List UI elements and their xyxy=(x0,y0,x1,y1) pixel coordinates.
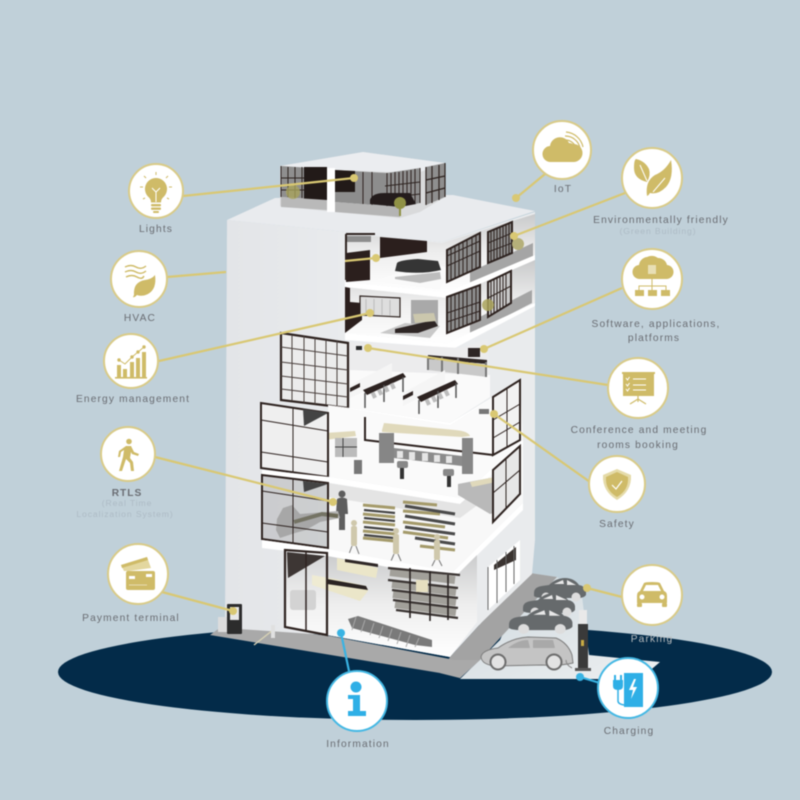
line: rtls xyxy=(155,457,337,506)
panel: iot xyxy=(533,121,591,195)
label: Payment terminal xyxy=(82,613,180,624)
label: Lights xyxy=(139,224,173,235)
bollard xyxy=(254,625,275,645)
shopping basket stack xyxy=(290,590,316,610)
panel: lights xyxy=(129,164,183,235)
panel: charging xyxy=(598,658,658,737)
icon: leaves xyxy=(634,159,672,196)
label: IoT xyxy=(554,184,572,195)
floor 2: retail xyxy=(313,380,523,498)
label: Parking xyxy=(631,634,673,645)
counter xyxy=(337,558,378,578)
table xyxy=(403,380,458,414)
headboard xyxy=(411,300,438,327)
rooftop pavilion xyxy=(280,152,445,218)
label: rooms booking xyxy=(597,440,679,451)
floor 3: conference xyxy=(348,340,490,423)
sublabel: (Real Time xyxy=(102,498,152,508)
table xyxy=(350,373,406,408)
slab xyxy=(330,397,493,428)
icon: charging station xyxy=(613,673,643,707)
sublabel: Localization System) xyxy=(76,509,174,519)
label: RTLS xyxy=(112,488,142,499)
panel: hvac xyxy=(111,251,167,324)
rug xyxy=(380,323,440,338)
shelf xyxy=(363,505,395,541)
shelf xyxy=(403,502,455,550)
panel: payment terminal xyxy=(82,544,180,624)
line: environment xyxy=(510,193,625,240)
stool xyxy=(443,469,454,487)
beige unit left xyxy=(313,431,362,474)
floor 5: living room xyxy=(345,214,535,292)
line: energy xyxy=(159,309,374,361)
line: hvac interior xyxy=(345,254,380,262)
window xyxy=(488,271,511,317)
ground floor xyxy=(285,552,477,657)
payment terminal xyxy=(218,604,242,634)
building body xyxy=(225,212,535,657)
window xyxy=(447,233,480,282)
right window floor 1 xyxy=(493,446,520,522)
label: HVAC xyxy=(124,313,156,324)
line: lights xyxy=(183,174,358,196)
icon: growth chart xyxy=(115,345,147,379)
line: iot xyxy=(512,174,545,202)
icon: info xyxy=(348,682,366,716)
beige display unit xyxy=(379,423,473,474)
bed xyxy=(395,320,438,333)
sofa xyxy=(276,505,340,538)
car: parked 2 xyxy=(523,593,575,616)
counter xyxy=(312,575,368,601)
mannequin xyxy=(349,520,359,554)
entrance door xyxy=(285,550,327,635)
icon: presentation board xyxy=(622,372,655,404)
panel: software xyxy=(592,249,720,344)
icon: car xyxy=(637,582,667,607)
slab xyxy=(345,303,535,348)
slab xyxy=(262,503,523,579)
label: Conference and meeting xyxy=(571,425,707,436)
concrete plinth xyxy=(210,624,480,678)
sublabel: (Green Building) xyxy=(620,226,696,236)
panel: conference xyxy=(571,358,707,451)
partition xyxy=(350,363,392,398)
floor 1: retail xyxy=(276,446,523,572)
car: parked 1 xyxy=(534,578,586,602)
line: safety xyxy=(490,410,590,482)
icon: cloud network xyxy=(632,256,674,296)
icon: credit cards xyxy=(121,557,155,590)
label: Environmentally friendly xyxy=(593,215,729,226)
window xyxy=(488,222,512,263)
line: parking xyxy=(583,584,622,597)
person xyxy=(336,490,348,530)
line: information xyxy=(337,629,349,671)
side entrance window xyxy=(488,540,520,610)
panel: safety xyxy=(589,456,645,530)
camera xyxy=(479,409,489,414)
label: Software, applications, xyxy=(592,319,720,330)
line: payment xyxy=(162,592,237,615)
line: hvac xyxy=(167,272,226,277)
window xyxy=(447,285,480,333)
panel: information xyxy=(326,671,390,750)
EV charger xyxy=(566,610,591,671)
building xyxy=(218,152,535,657)
back desks xyxy=(428,348,487,377)
icon: walking person xyxy=(118,439,139,471)
icon: light bulb xyxy=(140,172,172,213)
plant xyxy=(394,197,406,216)
label: platforms xyxy=(628,333,680,344)
icon: cloud with signal xyxy=(542,132,583,162)
slab xyxy=(262,440,523,504)
line: charging xyxy=(576,673,600,683)
window floor 2 xyxy=(261,403,328,477)
panel: environmentally friendly xyxy=(593,148,729,236)
plant xyxy=(286,185,300,199)
shelves xyxy=(388,568,460,621)
floor 4: bedroom xyxy=(345,260,535,343)
window floor 1 xyxy=(262,475,328,548)
large conference window xyxy=(281,333,348,408)
right window xyxy=(493,380,520,455)
label: Energy management xyxy=(76,394,190,405)
car: parked 3 xyxy=(509,608,572,634)
icon: air and leaf xyxy=(125,266,155,297)
sofa xyxy=(395,272,441,283)
back display xyxy=(458,477,497,514)
panel: rtls xyxy=(76,427,174,519)
slab xyxy=(345,255,535,298)
stool xyxy=(397,461,408,479)
callout lines xyxy=(155,174,625,683)
car: charging xyxy=(481,637,573,670)
line: software xyxy=(480,288,622,353)
mannequin xyxy=(391,528,401,561)
label: Charging xyxy=(604,726,654,737)
ground ellipse xyxy=(58,624,772,720)
panel: energy management xyxy=(76,334,190,405)
parking area xyxy=(440,573,660,679)
icon: shield xyxy=(603,469,631,500)
roof xyxy=(227,195,535,242)
label: Information xyxy=(326,739,390,750)
shopping carts xyxy=(348,616,432,647)
label: Safety xyxy=(599,519,635,530)
panel: parking xyxy=(622,565,682,645)
line: conference xyxy=(364,344,608,385)
mannequin xyxy=(432,534,442,566)
